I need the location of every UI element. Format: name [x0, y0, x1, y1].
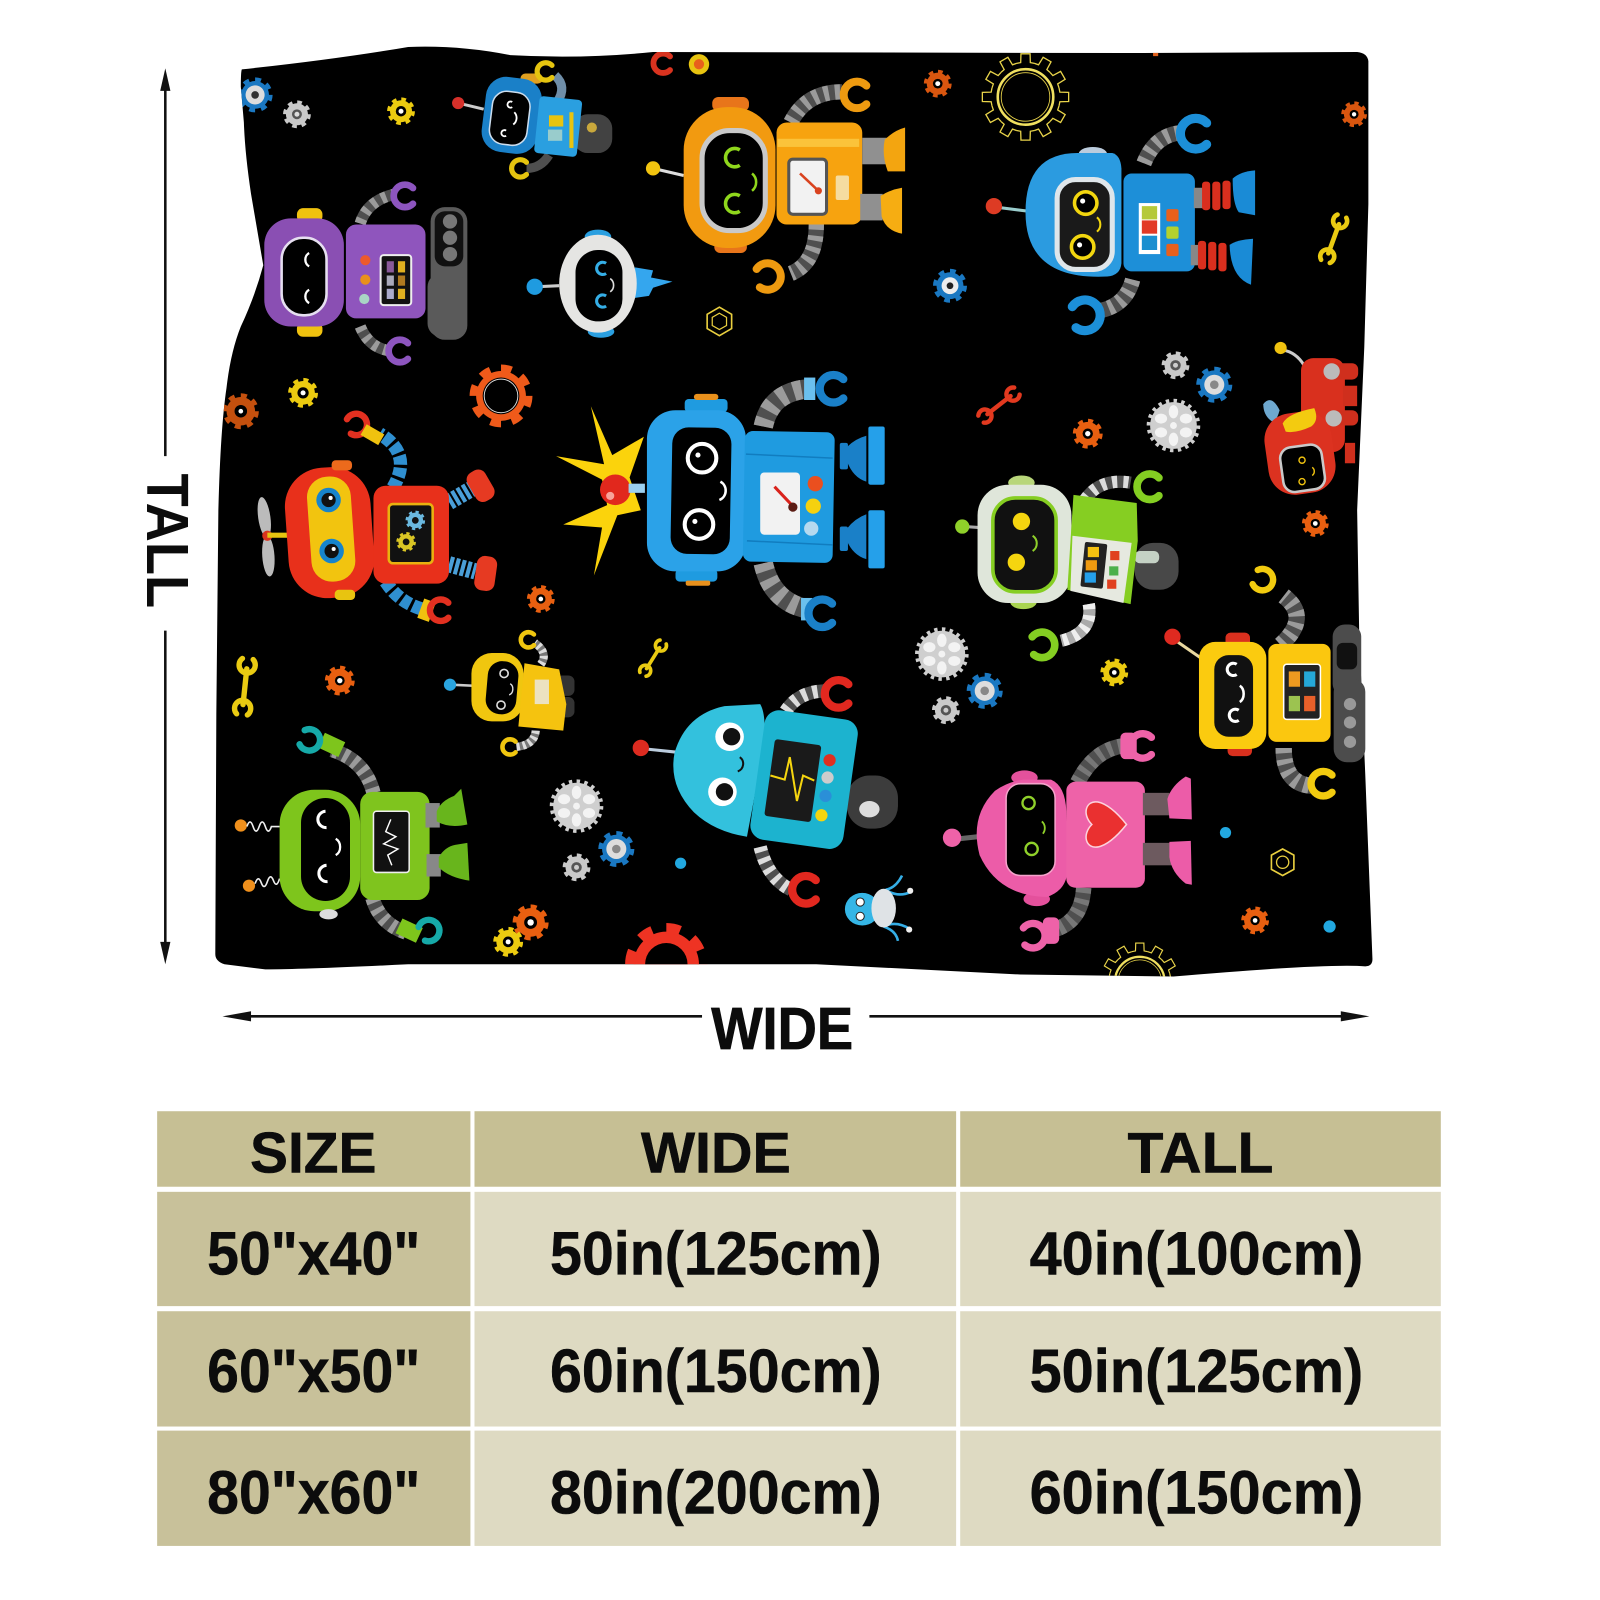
green head — [280, 790, 360, 919]
robot: small blue top — [452, 63, 612, 177]
robot: yellow right — [1164, 567, 1365, 796]
robot: green — [235, 727, 469, 943]
purple tracks — [431, 207, 467, 340]
heart — [1086, 802, 1127, 847]
red body — [373, 486, 449, 584]
robot: orange — [646, 82, 905, 291]
robot: blue top right — [986, 118, 1255, 332]
table row: 80x60: 60in(150cm) — [1030, 1458, 1363, 1526]
big body — [743, 431, 835, 563]
wheel — [1135, 543, 1179, 590]
robot: white rocket — [527, 230, 672, 338]
orange body — [777, 122, 862, 224]
table row: 50x40: 40in(100cm) — [1030, 1219, 1363, 1287]
blue legs — [1191, 170, 1255, 285]
robot: cyan dome — [633, 680, 898, 904]
red head — [282, 460, 377, 601]
big legs — [840, 427, 885, 568]
purple body — [346, 224, 426, 318]
table row: 80x60: 80in(200cm) — [550, 1458, 882, 1526]
yellow body — [1268, 644, 1331, 742]
blanket panel — [215, 47, 1372, 1020]
arm: orange bottom — [756, 224, 816, 291]
scattered gears and parts — [225, 51, 1365, 1020]
table row: 60x50: 60"x50" — [207, 1337, 420, 1405]
big head — [647, 410, 746, 571]
robot: big blue centre with burst — [556, 375, 885, 627]
arrow: wide dimension — [222, 1011, 1369, 1021]
yellow head — [1199, 642, 1266, 749]
yellow tracks — [1333, 624, 1365, 762]
orange legs — [860, 128, 905, 234]
pink legs — [1143, 777, 1192, 885]
wheel — [847, 776, 898, 829]
robot: pink — [943, 733, 1192, 949]
table row: 60x50: 50in(125cm) — [1030, 1337, 1363, 1405]
big arm top — [763, 375, 843, 427]
purple lower track — [428, 273, 466, 337]
table row: 50x40 — [157, 1192, 1441, 1306]
robot: tiny capsule — [845, 876, 913, 941]
table header row: SIZE — [250, 1121, 377, 1185]
arm: red bottom — [386, 582, 448, 622]
label: WIDE: WIDE — [711, 995, 853, 1062]
white-green head — [978, 485, 1071, 603]
big arm bottom — [763, 563, 832, 627]
robot: purple — [264, 185, 467, 362]
table row: 80x60 — [157, 1431, 1441, 1546]
purple head — [264, 218, 344, 327]
green legs — [426, 789, 469, 881]
cyan head — [673, 704, 765, 837]
table row: 80x60: 80"x60" — [207, 1458, 420, 1526]
table row: 60x50 — [157, 1311, 1441, 1427]
arm: red top — [346, 411, 401, 488]
pink head — [977, 780, 1067, 897]
blue body — [1123, 173, 1195, 271]
red legs — [449, 466, 498, 592]
arrow: tall dimension — [160, 68, 170, 964]
blue head — [1026, 153, 1121, 277]
table header row: WIDE — [641, 1121, 791, 1185]
antennas — [235, 819, 280, 892]
burst — [556, 406, 644, 576]
robot: white and green — [955, 474, 1179, 658]
propeller — [255, 496, 288, 577]
arm: blue top — [1144, 118, 1207, 163]
green body — [360, 792, 430, 900]
arm: blue bottom — [1071, 280, 1133, 332]
white-green body — [1067, 495, 1138, 604]
arm: orange top — [791, 82, 866, 122]
robot: red partly cropped — [1261, 342, 1358, 498]
table header row: TALL — [1128, 1121, 1273, 1185]
table row: 60x50: 60in(150cm) — [550, 1337, 882, 1405]
robot: small yellow — [444, 632, 574, 755]
table row: 50x40: 50in(125cm) — [550, 1219, 882, 1287]
cyan body — [749, 708, 860, 851]
orange head — [684, 107, 776, 248]
size table — [157, 1111, 1441, 1546]
robot: red with propeller — [255, 411, 498, 622]
label: TALL: TALL — [134, 473, 201, 608]
table row: 50x40: 50"x40" — [207, 1219, 420, 1287]
pink body — [1066, 782, 1145, 888]
table header row — [157, 1111, 1441, 1187]
